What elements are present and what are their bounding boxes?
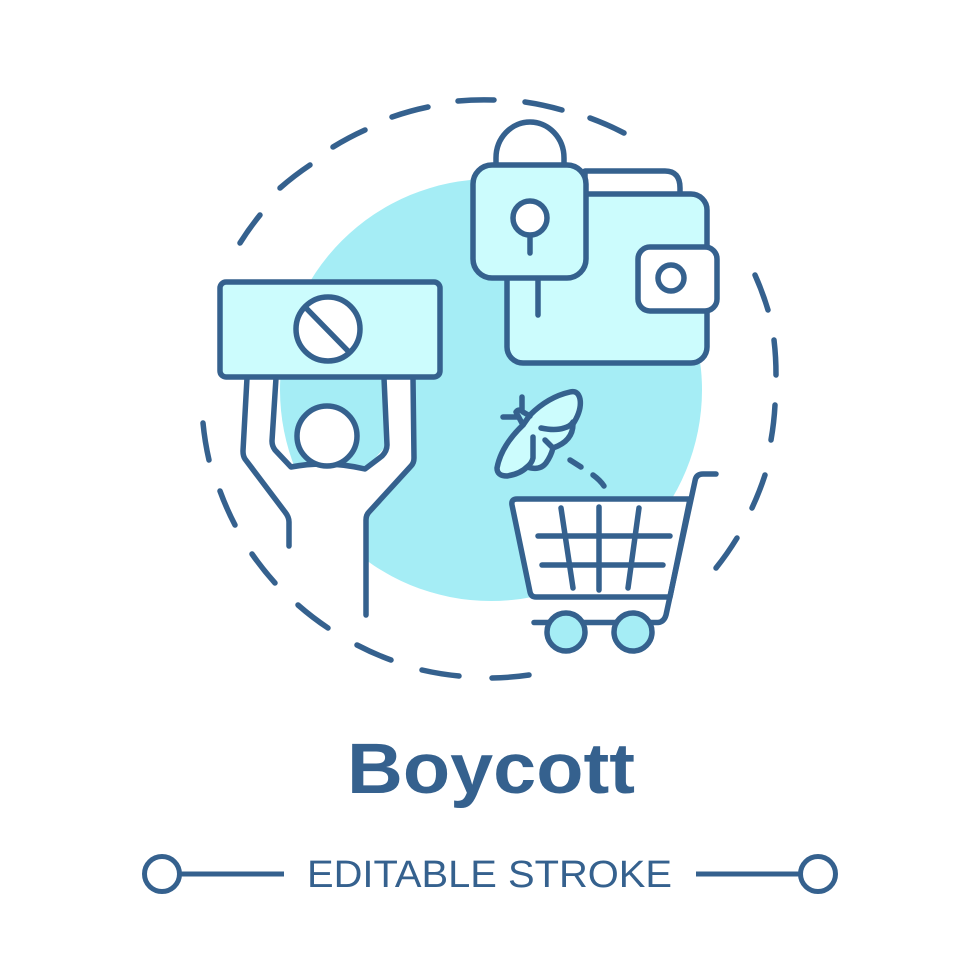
moth antennae	[503, 397, 530, 425]
cart grid	[538, 507, 670, 590]
wallet back flap	[585, 171, 680, 196]
moth wing details	[527, 422, 573, 467]
dashed ring	[203, 100, 776, 678]
title: Boycott	[347, 730, 635, 809]
left arm outline	[243, 378, 289, 546]
cart handle and frame	[534, 474, 716, 622]
wallet body	[507, 194, 707, 363]
moth wings	[497, 392, 580, 476]
inner arms and shoulders	[272, 378, 387, 469]
footer: editable stroke	[144, 854, 836, 896]
sign board	[220, 282, 440, 377]
gap between raised arms	[280, 380, 384, 466]
cart basket	[512, 499, 690, 597]
footer label: EDITABLE STROKE	[307, 854, 672, 896]
padlock shackle	[496, 122, 564, 165]
left wheel	[547, 613, 585, 651]
padlock strap line	[535, 280, 541, 315]
head	[297, 406, 357, 466]
right arm outline	[366, 378, 414, 615]
padlock body	[473, 165, 586, 278]
icon: moth	[497, 392, 580, 476]
clasp button	[658, 265, 684, 291]
icon: protester holding sign	[220, 282, 440, 615]
right wheel	[614, 613, 652, 651]
right connector	[696, 856, 836, 892]
background circle	[280, 179, 702, 601]
icon: shopping cart	[512, 474, 716, 651]
keyhole	[513, 201, 547, 253]
protester body fill	[243, 378, 414, 570]
icon: locked wallet	[473, 122, 717, 363]
left connector	[144, 856, 284, 892]
moth flight path	[570, 460, 604, 486]
wallet clasp	[638, 247, 717, 311]
prohibition symbol	[296, 297, 360, 361]
